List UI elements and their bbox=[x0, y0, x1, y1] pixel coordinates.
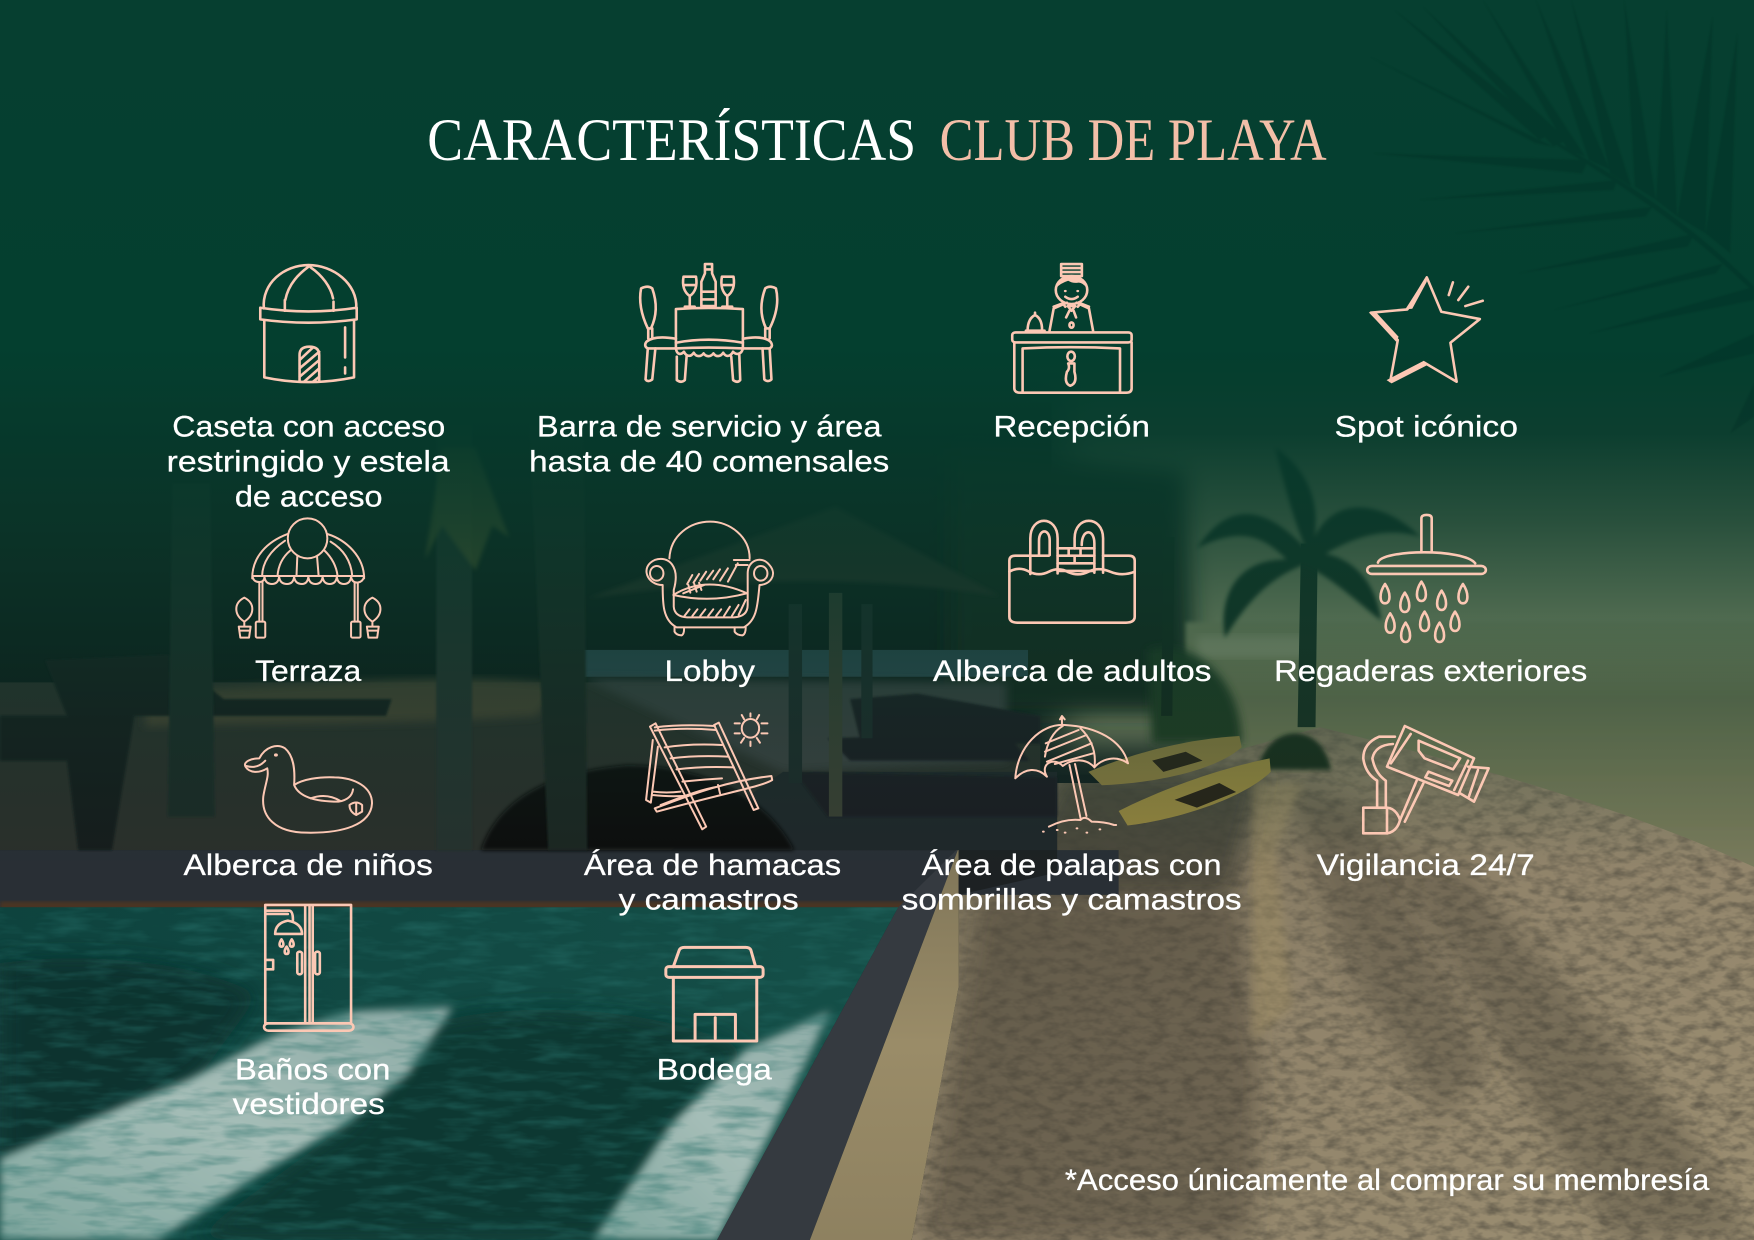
label: sombrillas y camastros bbox=[902, 883, 1242, 916]
icon: shower head bbox=[1367, 515, 1486, 642]
feature: bodega bbox=[657, 947, 772, 1086]
label bbox=[233, 1053, 390, 1121]
label bbox=[902, 849, 1242, 916]
label: Alberca de adultos bbox=[933, 655, 1211, 688]
icon: security camera bbox=[1363, 726, 1489, 833]
feature: vigilancia bbox=[1317, 726, 1535, 882]
label: Barra de servicio y área bbox=[537, 410, 882, 443]
label: restringido y estela bbox=[167, 446, 450, 479]
feature: barra de servicio bbox=[529, 264, 889, 479]
icon: dome booth bbox=[260, 265, 357, 382]
label: Baños con bbox=[235, 1053, 390, 1086]
icon: armchair bbox=[646, 522, 773, 635]
feature: alberca de niños bbox=[183, 746, 433, 882]
icon: star bbox=[1369, 276, 1483, 383]
label: Spot icónico bbox=[1335, 410, 1518, 443]
feature: spot icónico bbox=[1335, 276, 1518, 443]
label: Regaderas exteriores bbox=[1274, 655, 1587, 688]
icon: dining table bbox=[640, 264, 777, 382]
label: Bodega bbox=[657, 1053, 772, 1086]
feature: recepción bbox=[993, 264, 1150, 443]
label: y camastros bbox=[619, 883, 799, 916]
icon: duck float bbox=[245, 746, 372, 833]
label: Alberca de niños bbox=[183, 849, 433, 882]
feature: baños bbox=[233, 905, 390, 1121]
title bbox=[427, 107, 1327, 174]
icon: shower cabin bbox=[264, 905, 353, 1031]
label bbox=[584, 849, 841, 916]
label: vestidores bbox=[233, 1088, 385, 1121]
label: Lobby bbox=[664, 655, 755, 688]
icon: canopy with plants bbox=[236, 518, 380, 638]
footnote: *Acceso únicamente al comprar su membresía bbox=[1065, 1164, 1710, 1197]
top-right palm frond shadow bbox=[1370, 0, 1754, 433]
label: de acceso bbox=[235, 481, 383, 514]
icon: storage building bbox=[666, 947, 763, 1041]
label bbox=[167, 410, 450, 514]
feature: terraza bbox=[236, 518, 380, 688]
label: Área de palapas con bbox=[922, 849, 1222, 882]
title: CLUB DE PLAYA bbox=[940, 107, 1327, 174]
pool water bbox=[0, 907, 906, 1240]
title: CARACTERÍSTICAS bbox=[427, 107, 916, 174]
kayaks bbox=[1088, 736, 1242, 785]
feature: regaderas bbox=[1274, 515, 1587, 688]
icon: receptionist at desk bbox=[1012, 264, 1132, 393]
icon: beach umbrella bbox=[1015, 716, 1128, 833]
label: Terraza bbox=[255, 655, 362, 688]
feature: área de palapas bbox=[902, 716, 1242, 916]
palm trunks bbox=[168, 483, 215, 817]
feature: lobby bbox=[646, 522, 773, 688]
icon: beach lounger and sun bbox=[646, 713, 772, 829]
feature: área de hamacas bbox=[584, 713, 841, 916]
feature: caseta bbox=[167, 265, 450, 514]
label bbox=[529, 410, 889, 479]
label: hasta de 40 comensales bbox=[529, 446, 889, 479]
label: Vigilancia 24/7 bbox=[1317, 849, 1535, 882]
label: Recepción bbox=[993, 410, 1150, 443]
label: Área de hamacas bbox=[584, 849, 841, 882]
feature: alberca de adultos bbox=[933, 521, 1211, 688]
icon: pool with ladder bbox=[1009, 521, 1135, 623]
label: Caseta con acceso bbox=[172, 410, 445, 443]
